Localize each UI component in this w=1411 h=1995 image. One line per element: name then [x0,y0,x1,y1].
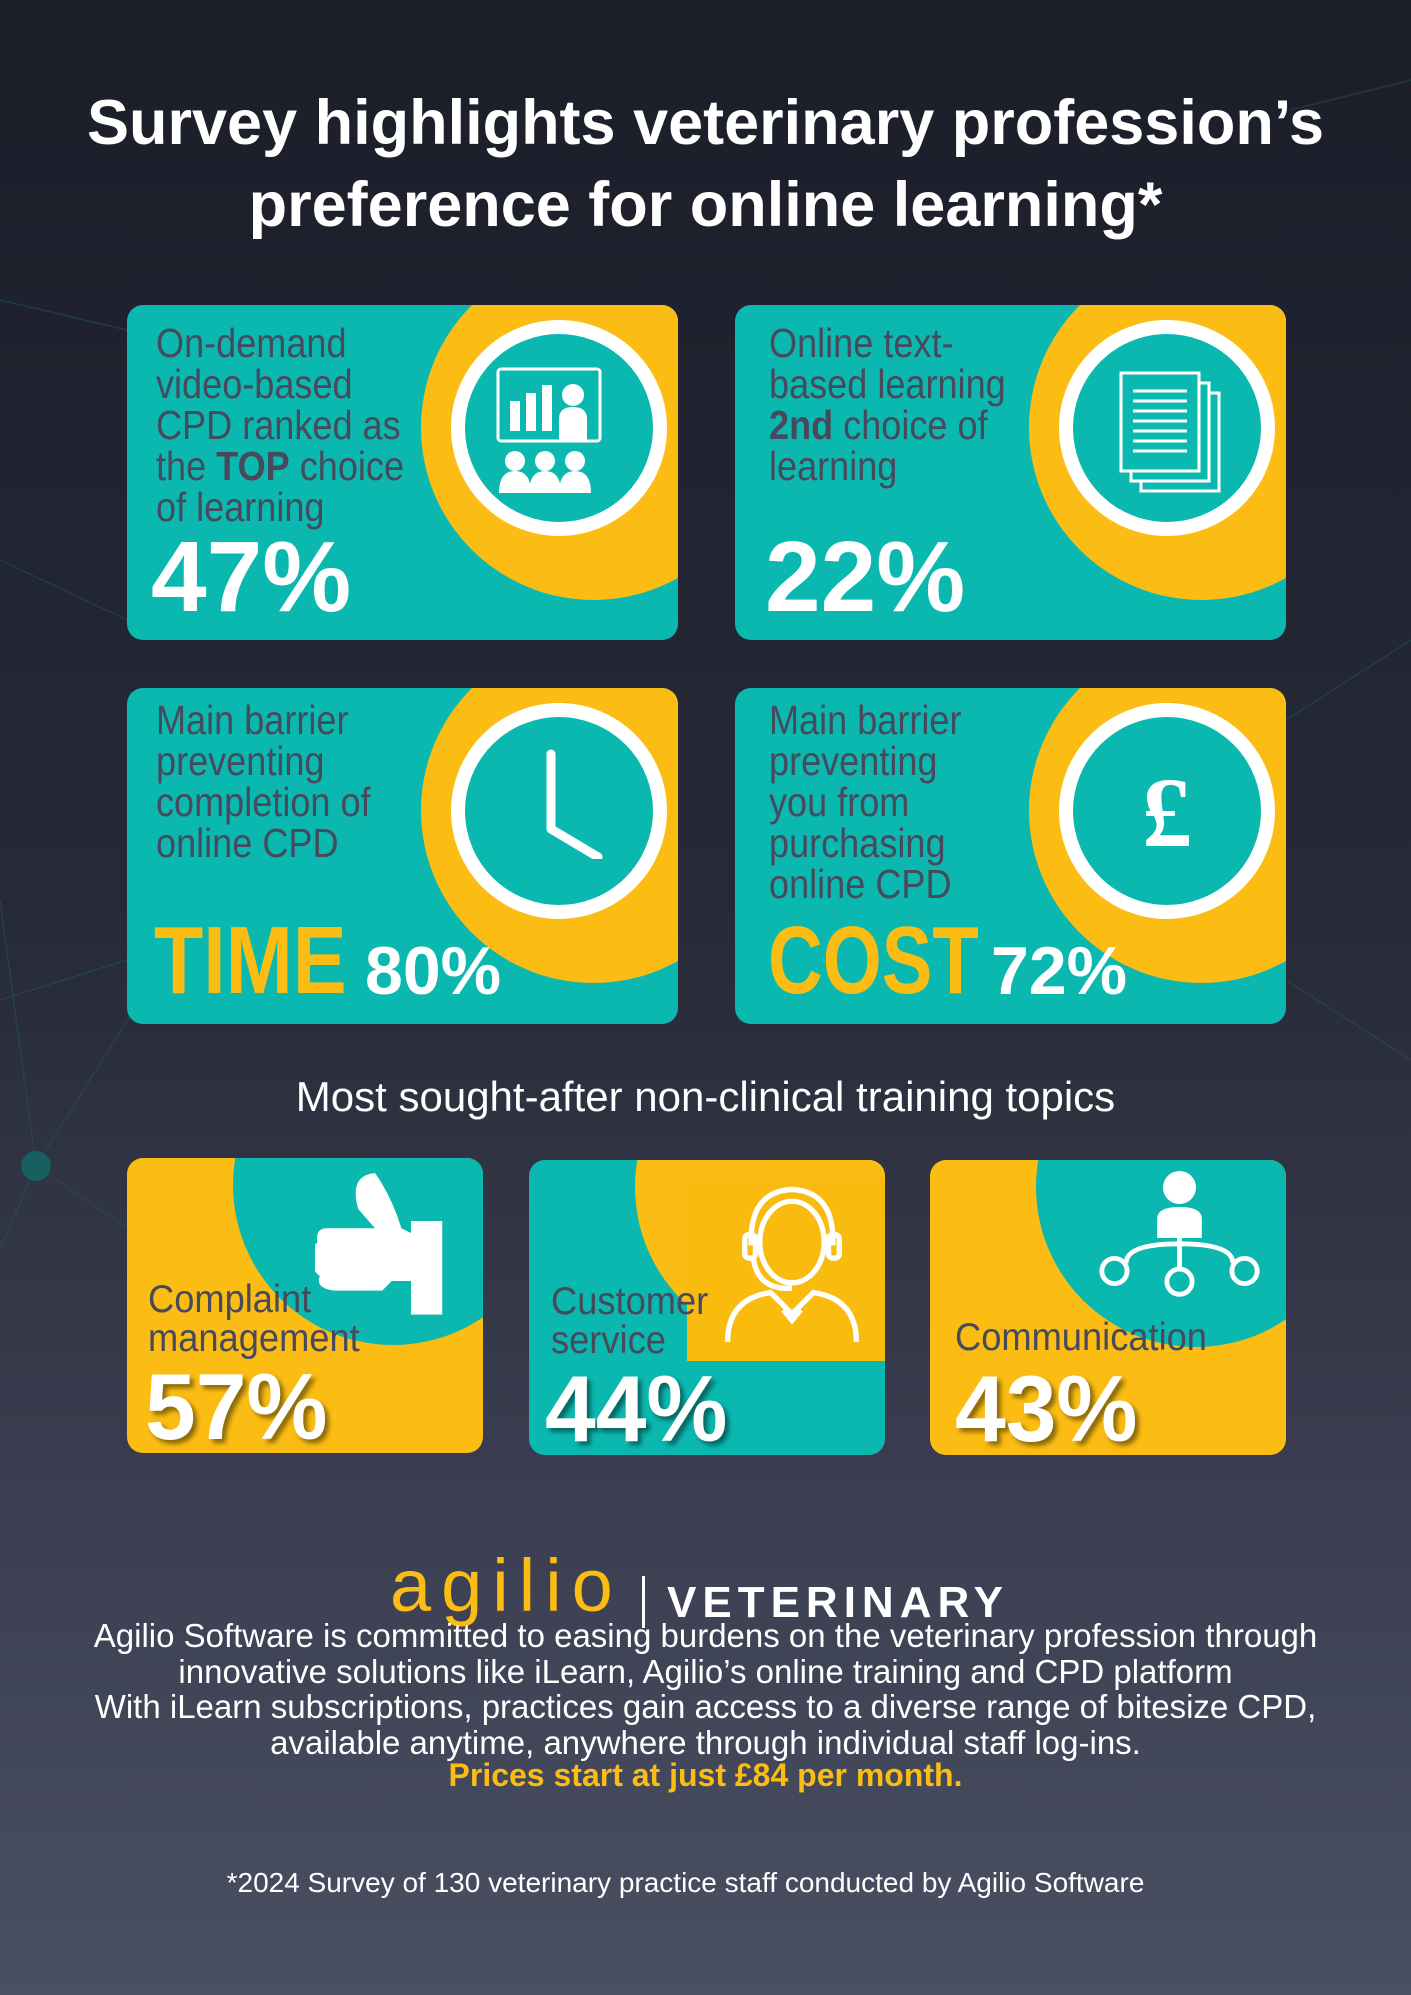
text [769,320,1006,489]
panel: cost barrier [735,688,1286,1024]
text: of learning [156,484,324,530]
text: Communication [955,1316,1207,1359]
text block: description: With iLearn subscriptions, practices gain access to a diverse range of bitesize CPD, [95,1688,1316,1725]
icon: presentation [421,305,678,600]
icon: thumbs up [315,1173,442,1315]
icon: headset person [724,1186,860,1342]
text: CPD ranked as [156,402,401,448]
text: the TOP choice [156,443,404,489]
text: Complaint [148,1278,311,1321]
stat COST: COST [768,907,979,1014]
icon: clock [421,688,678,983]
icon: pound [1029,688,1286,983]
text block: description: innovative solutions like iLearn, Agilio’s online training and CPD platform [178,1652,1233,1690]
text: online CPD [156,820,339,866]
stat 80%: 80% [365,933,501,1009]
panel: text-based [735,305,1286,640]
text: Main barrier [156,697,348,743]
decorative circle [233,1025,553,1345]
text [156,697,371,866]
title [87,88,1324,240]
icon: pound: £ [1142,757,1192,868]
text: completion of [156,779,371,825]
decorative square [687,1177,891,1361]
stat 22%: 22% [765,521,965,633]
heading: topics: Most sought-after non-clinical training topics [296,1073,1115,1120]
decorative circle [1036,1027,1356,1347]
text block: description: available anytime, anywhere through individual staff log-ins. [270,1724,1141,1760]
footnote: *2024 Survey of 130 veterinary practice staff conducted by Agilio Software [227,1867,1144,1898]
text: online CPD [769,861,952,907]
text: Customer [551,1280,708,1323]
text: Main barrier [769,697,961,743]
text: you from [769,779,909,825]
text: learning [769,443,897,489]
text: based learning [769,361,1006,407]
decorative circle [635,1027,955,1347]
text: purchasing [769,820,946,866]
icon: documents [1029,305,1286,600]
text: Online text- [769,320,953,366]
panel: time barrier [127,688,678,1024]
logo: agilio veterinary [390,1544,1009,1628]
text: service [551,1319,666,1362]
text [769,697,961,907]
text: On-demand [156,320,347,366]
text: 2nd choice of [769,402,988,448]
panel: communication [930,1160,1286,1455]
icon: network person [1099,1171,1260,1297]
panel: complaint management [127,1158,483,1453]
stat TIME: TIME [154,907,347,1014]
panel: customer service [529,1160,885,1455]
panel: video CPD [127,305,678,640]
logo: agilio veterinary: agilio [390,1544,623,1627]
text: preventing [156,738,324,784]
logo: agilio veterinary: VETERINARY [667,1578,1009,1627]
text: video-based [156,361,353,407]
stat 72%: 72% [991,933,1127,1009]
text block: description: Agilio Software is committed to easing burdens on the veterinary profession through [94,1617,1317,1654]
stat 47%: 47% [151,521,351,633]
text [551,1280,708,1362]
text [156,320,404,530]
text [148,1278,360,1360]
callout: price: Prices start at just £84 per month. [449,1757,962,1793]
text: preventing [769,738,937,784]
title: preference for online learning* [249,170,1162,240]
title: Survey highlights veterinary profession’s [87,88,1324,158]
text block: description [94,1617,1317,1761]
text: management [148,1317,360,1360]
